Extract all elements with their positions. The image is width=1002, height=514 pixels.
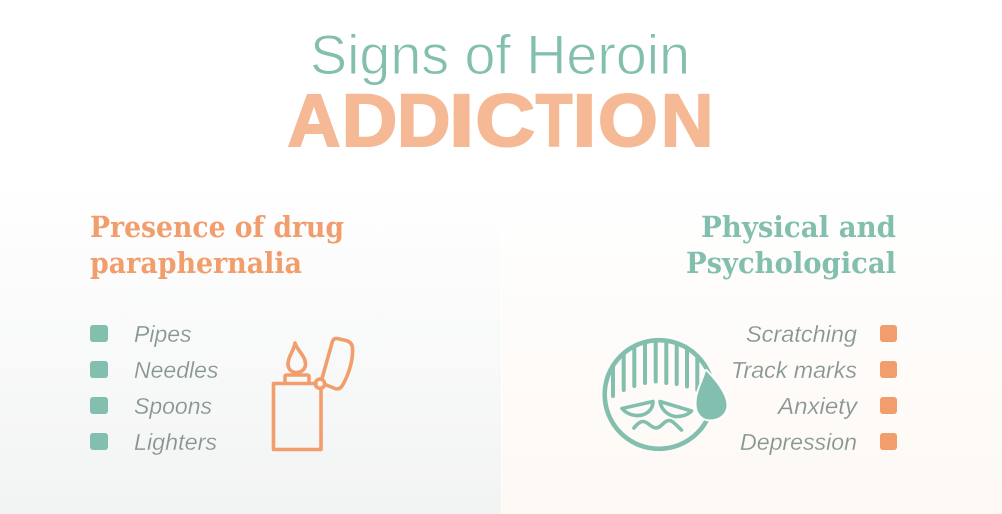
list: symptoms: Track marks xyxy=(731,357,858,383)
list: symptoms: Scratching xyxy=(746,321,857,347)
title line: ADDICTION: O xyxy=(598,79,658,162)
panel: left background xyxy=(0,178,501,514)
heading: Physical and Psychological xyxy=(686,210,896,280)
list: paraphernalia items: Needles xyxy=(134,357,219,383)
list: paraphernalia items: Lighters xyxy=(134,429,218,455)
list: symptoms: Anxiety xyxy=(776,393,859,419)
title line: ADDICTION: C xyxy=(475,79,535,162)
title line: ADDICTION xyxy=(288,79,713,162)
icon: lighter xyxy=(274,338,353,450)
title line: Signs of Heroin: Signs of Heroin xyxy=(310,23,690,86)
panel: physical and psychological xyxy=(605,210,897,455)
title line: ADDICTION: T xyxy=(536,80,572,162)
panel: paraphernalia xyxy=(90,210,353,455)
title line: ADDICTION: D xyxy=(397,79,450,162)
title line: ADDICTION: N xyxy=(661,79,713,162)
panel: right background xyxy=(502,178,1002,514)
icon: sad sweating face xyxy=(605,340,726,449)
list: paraphernalia items xyxy=(90,321,219,455)
list: symptoms: Depression xyxy=(740,429,857,455)
heading: Presence of drug paraphernalia: Presence of drug xyxy=(90,210,344,244)
heading: Physical and Psychological: Psychological xyxy=(686,246,896,280)
title line: ADDICTION: A xyxy=(288,79,340,162)
heading: Presence of drug paraphernalia: paraphernalia xyxy=(90,246,302,280)
title line: ADDICTION: D xyxy=(342,79,397,162)
title line: ADDICTION: I xyxy=(572,80,596,162)
title line: ADDICTION: I xyxy=(449,79,475,162)
heading: Physical and Psychological: Physical and xyxy=(701,210,896,244)
list: symptoms xyxy=(731,321,897,455)
list: paraphernalia items: Pipes xyxy=(134,321,192,347)
list: paraphernalia items: Spoons xyxy=(134,393,213,419)
heading: Presence of drug paraphernalia xyxy=(90,210,344,280)
title xyxy=(288,23,713,162)
